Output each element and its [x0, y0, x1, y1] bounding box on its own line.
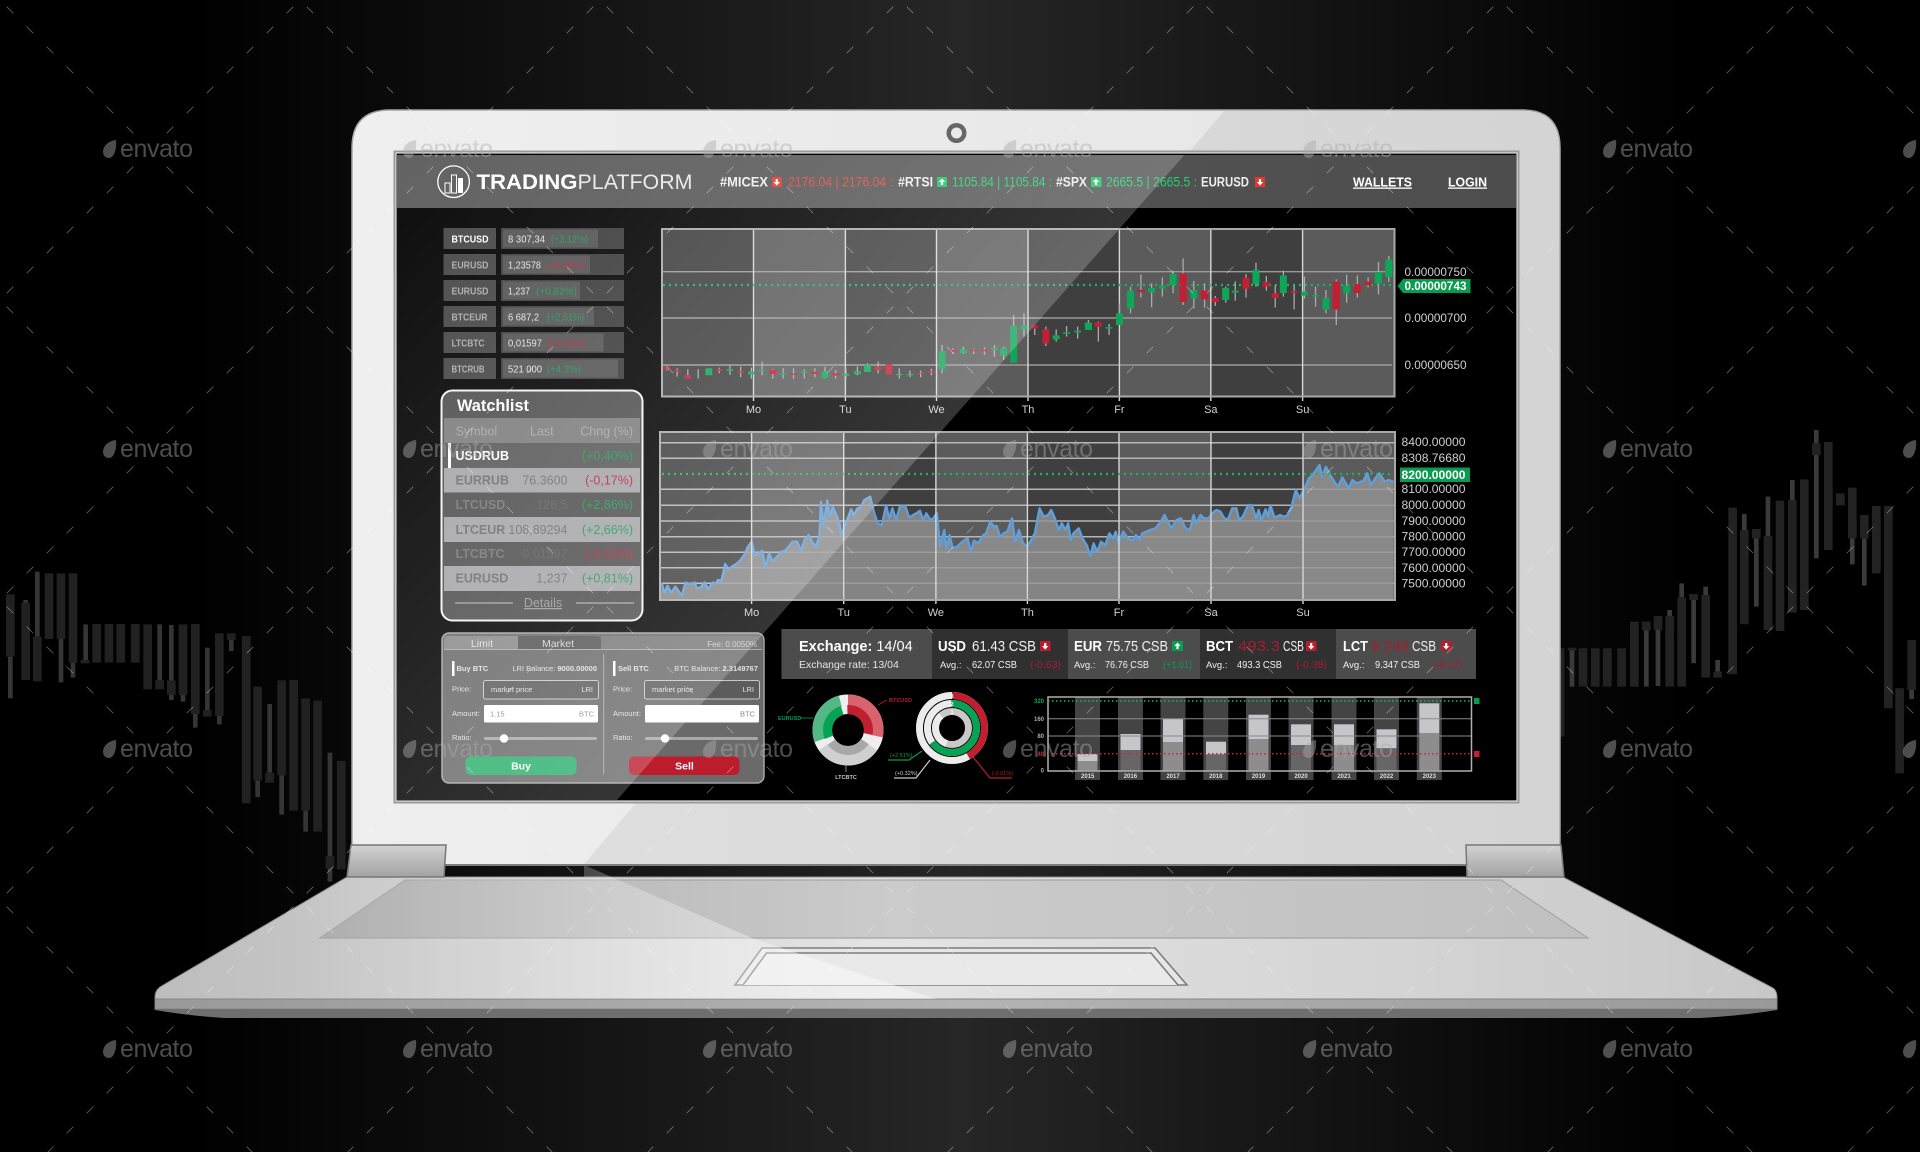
nav: wallets: WALLETS	[1353, 174, 1412, 190]
watermarks: envato	[720, 1035, 793, 1063]
ticker row: LTCBTC: LTCBTC	[452, 338, 485, 350]
candlestick chart	[662, 229, 1470, 416]
table header: Symbol	[456, 424, 497, 438]
watermarks: envato	[1620, 435, 1693, 463]
value axis: 160	[1034, 717, 1045, 723]
base front lip	[155, 999, 1777, 1009]
value axis: 80	[1037, 734, 1045, 740]
target line	[662, 473, 1394, 475]
callout: white: (+0.32%)	[895, 771, 918, 777]
exchange date	[782, 629, 932, 679]
tab: limit	[444, 636, 518, 650]
day axis: Fr	[1114, 607, 1125, 619]
row: LTCEUR: LTCEUR	[456, 523, 505, 537]
ring numbers: 1	[950, 710, 954, 716]
watermarks: envato	[1320, 735, 1393, 763]
row: LTCUSD	[444, 492, 640, 517]
day axis: Th	[1021, 607, 1034, 619]
ticker row: BTCUSD: (+3,12%)	[551, 234, 588, 246]
sell form: Price:	[613, 684, 632, 694]
details link: Details	[524, 596, 562, 610]
watermarks: envato	[1620, 1035, 1693, 1063]
rate: EUR: 76.76 CSB	[1105, 660, 1149, 671]
market ticker: #MICEX	[720, 174, 768, 190]
current price tag: 8200.00000	[1402, 470, 1466, 482]
donut chart: rings	[888, 694, 1013, 778]
ticker row: BTCRUB	[444, 358, 624, 379]
year axis: 2021	[1337, 774, 1351, 780]
watermarks: envato	[1320, 135, 1393, 163]
row: USDRUB	[444, 443, 640, 468]
rate: LCT: 9.246	[1371, 639, 1409, 655]
year axis: 2018	[1209, 774, 1223, 780]
buy form: 1.15	[490, 710, 505, 718]
rate: LCT: LCT	[1343, 639, 1368, 655]
day axis: Fr	[1114, 404, 1125, 416]
ticker row: EURUSD: 1,23578	[508, 260, 541, 272]
ring numbers: 3	[950, 694, 954, 700]
rate: BCT: (-0.38)	[1296, 660, 1327, 671]
label: EURUSD: EURUSD	[778, 716, 801, 722]
panel: order form	[442, 633, 764, 783]
ticker row: LTCBTC: 0,01597	[508, 338, 542, 350]
day axis: Tu	[837, 607, 850, 619]
sell form: Sell BTC	[618, 664, 649, 673]
price axis: 7600.00000	[1402, 563, 1466, 575]
callout: red: (-0.01%)	[992, 771, 1013, 777]
sell form: LRI	[742, 685, 754, 694]
base underside	[155, 1009, 1777, 1018]
row: USDRUB: (+0,40%)	[582, 449, 633, 463]
background candles: left	[10, 572, 341, 882]
market ticker: EURUSD	[1201, 174, 1249, 190]
legend markers	[1474, 698, 1480, 757]
watermarks: envato	[420, 735, 493, 763]
buy form: Price:	[452, 684, 471, 694]
buy form: Ratio:	[452, 733, 472, 742]
price axis: 7500.00000	[1402, 578, 1466, 590]
rate: USD: (-0.63)	[1030, 660, 1061, 671]
day axis: Mo	[746, 404, 761, 416]
sell form: market price	[652, 685, 693, 694]
price line	[663, 284, 1394, 286]
sell button	[629, 756, 740, 775]
year axis: 2019	[1252, 774, 1266, 780]
sell form: Ratio:	[613, 733, 633, 742]
keyboard area	[320, 880, 1588, 938]
row: LTCBTC: (-0,01%)	[585, 547, 633, 561]
price axis: 8000.00000	[1402, 500, 1466, 512]
buy form: Buy BTC	[456, 664, 489, 673]
laptop lid	[352, 110, 1560, 865]
rate: USD	[932, 629, 1068, 679]
watermarks: envato	[1320, 1035, 1393, 1063]
day axis: Mo	[744, 607, 759, 619]
tab: market	[518, 636, 601, 650]
price axis: 0.00000700	[1404, 313, 1466, 325]
hinge: left	[347, 845, 446, 877]
day axis: Su	[1296, 404, 1309, 416]
bars	[1078, 703, 1439, 761]
donut chart: allocation	[778, 698, 912, 781]
webcam	[946, 123, 966, 143]
target line	[1048, 700, 1471, 702]
day axis: We	[928, 404, 945, 416]
day axis: Sa	[1204, 404, 1218, 416]
rate: USD: 62.07 CSB	[972, 660, 1017, 671]
market ticker: 2665.5 | 2665.5 :	[1106, 174, 1197, 190]
row: LTCUSD: LTCUSD	[456, 498, 505, 512]
row: EURUSD: (+0,81%)	[582, 572, 633, 586]
ticker row: EURUSD 2: (+0,82%)	[536, 286, 577, 298]
ticker list	[444, 228, 624, 379]
watermarks: envato	[1020, 735, 1093, 763]
ticker row: BTCRUB: 521 000	[508, 364, 542, 376]
buy form	[452, 661, 598, 743]
buy form: market price	[491, 685, 532, 694]
watchlist title: Watchlist	[457, 397, 529, 415]
row: LTCEUR: 108,89294	[508, 523, 568, 537]
market ticker: 1105.84 | 1105.84 :	[952, 174, 1052, 190]
year axis: 2016	[1124, 774, 1138, 780]
watermarks: envato	[120, 735, 193, 763]
row: LTCUSD: 128,5	[536, 498, 568, 512]
rate: BCT: BCT	[1206, 639, 1233, 655]
day axis: Tu	[839, 404, 852, 416]
price axis: 7800.00000	[1402, 532, 1466, 544]
watermarks: envato	[1020, 435, 1093, 463]
ticker row: EURUSD: (+0,32%)	[547, 260, 584, 272]
market ticker: #SPX	[1056, 174, 1087, 190]
buy form: LRI Balance: 9000.00000	[512, 664, 597, 673]
laptop base	[155, 877, 1777, 1018]
sell button: Sell	[675, 760, 694, 772]
ticker row: EURUSD 2: EURUSD	[452, 286, 489, 298]
current price tag: 0.00000743	[1404, 281, 1466, 293]
rate: BCT: Avg.:	[1206, 660, 1227, 671]
rate: BCT: 493.3	[1238, 639, 1280, 655]
buy form: Amount:	[452, 709, 480, 718]
rate: BCT: 493.3 CSB	[1237, 660, 1282, 671]
market ticker	[720, 174, 1265, 190]
exchange date: Exchange: 14/04	[799, 639, 913, 655]
watermarks: envato	[720, 135, 793, 163]
ticker row: BTCUSD: 8 307,34	[508, 234, 545, 246]
watermarks: envato	[1320, 435, 1393, 463]
table header: Chng (%)	[580, 424, 633, 438]
price axis: 7700.00000	[1402, 547, 1466, 559]
price axis	[1404, 267, 1466, 372]
header bar	[397, 155, 1516, 208]
rate: USD: USD	[938, 639, 966, 655]
sell form: BTC Balance: 2.3149767	[674, 664, 758, 673]
candles, early week	[667, 345, 942, 379]
label: LTCBTC: LTCBTC	[835, 775, 857, 781]
rate: USD: Avg.:	[940, 660, 961, 671]
watermarks: envato	[1020, 135, 1093, 163]
label: BTCUSD: BTCUSD	[889, 698, 912, 704]
value axis: 320	[1034, 699, 1045, 705]
rate: LCT: CSB	[1412, 639, 1436, 655]
row: USDRUB: USDRUB	[456, 449, 509, 463]
ticker row: BTCEUR: 6 687,2	[508, 312, 539, 324]
ticker row: BTCUSD: BTCUSD	[452, 234, 489, 246]
row: EURUSD: 1,237	[536, 572, 568, 586]
price axis: 8100.00000	[1402, 484, 1466, 496]
background candles: right	[1560, 430, 1912, 773]
market ticker: #RTSI	[898, 174, 933, 190]
rate: LCT: (-0.17)	[1433, 660, 1462, 671]
day axis: We	[928, 607, 944, 619]
watermarks: envato	[720, 435, 793, 463]
sell form: Amount:	[613, 709, 641, 718]
ticker row: LTCBTC: (-0,01%)	[547, 338, 585, 350]
watermarks: envato	[720, 735, 793, 763]
ring numbers: 2	[950, 702, 954, 708]
table header	[444, 418, 640, 443]
price axis: 7900.00000	[1402, 516, 1466, 528]
sell form: BTC	[740, 710, 756, 718]
brand name: TRADING PLATFORM	[476, 171, 692, 194]
day axis: Th	[1022, 404, 1034, 416]
day axis	[744, 607, 1310, 619]
row: LTCBTC	[444, 542, 640, 566]
year axis: 2015	[1081, 774, 1095, 780]
ticker row: BTCRUB: BTCRUB	[452, 364, 485, 376]
rate: EUR: (+1.01)	[1163, 660, 1192, 671]
rate: EUR: Avg.:	[1074, 660, 1095, 671]
exchange rate strip	[782, 629, 1476, 679]
candles, late week	[953, 256, 1389, 363]
price axis: 8400.00000	[1402, 437, 1466, 449]
price area and line	[661, 465, 1394, 600]
year axis: 2017	[1166, 774, 1180, 780]
buy button: Buy	[511, 760, 531, 772]
hinge: right	[1466, 845, 1564, 877]
value axis: 0	[1041, 768, 1045, 774]
row: LTCEUR: (+2,66%)	[582, 523, 633, 537]
rate: LCT	[1336, 629, 1476, 679]
row: EURUSD	[444, 566, 640, 591]
day axis	[746, 404, 1309, 416]
row: LTCUSD: (+2,86%)	[582, 498, 633, 512]
watermarks: envato	[420, 435, 493, 463]
ticker row: BTCRUB: (+4,3%)	[547, 364, 581, 376]
tab: limit: Limit	[471, 638, 493, 650]
watermarks: envato	[120, 135, 193, 163]
touchpad	[735, 948, 1187, 985]
ticker row: BTCEUR: (+2,51%)	[547, 312, 584, 324]
tab: market: Market	[542, 638, 574, 650]
ticker row: BTCEUR	[444, 306, 624, 327]
row: EURRUB: 76.3600	[522, 474, 568, 488]
price axis: 0.00000650	[1404, 360, 1466, 372]
buy button	[466, 756, 576, 775]
bar chart	[1034, 697, 1480, 780]
callout: green: (+2.51%)	[890, 753, 913, 759]
rate: BCT	[1200, 629, 1336, 679]
watermarks	[120, 135, 1693, 1063]
ticker row: EURUSD 2	[444, 280, 624, 301]
row: LTCEUR	[444, 517, 640, 542]
row: EURRUB: EURRUB	[456, 474, 509, 488]
row: LTCBTC: 0,01597	[522, 547, 568, 561]
price axis	[1402, 437, 1466, 590]
fee label	[601, 636, 762, 649]
ring numbers	[950, 694, 954, 716]
rate: BCT: CSB	[1283, 639, 1304, 655]
screen	[394, 152, 1518, 802]
day axis: Su	[1296, 607, 1310, 619]
ticker row: EURUSD	[444, 254, 624, 275]
row: EURRUB: (-0,17%)	[585, 474, 633, 488]
stop line	[1048, 753, 1471, 755]
ticker row: BTCEUR: BTCEUR	[452, 312, 488, 324]
line chart	[660, 432, 1470, 619]
year axis: 2023	[1423, 774, 1437, 780]
year axis: 2020	[1294, 774, 1308, 780]
ticker row: EURUSD: EURUSD	[452, 260, 489, 272]
fee label: Fee: 0.0050%	[707, 640, 757, 649]
watermarks: envato	[120, 435, 193, 463]
buy form: LRI	[581, 685, 593, 694]
ticker row: BTCUSD	[444, 228, 624, 249]
buy form: BTC	[579, 710, 595, 718]
watermarks: envato	[420, 1035, 493, 1063]
watermarks: envato	[420, 135, 493, 163]
row: LTCBTC: LTCBTC	[456, 547, 505, 561]
watermarks: envato	[1020, 1035, 1093, 1063]
ticker row: EURUSD 2: 1,237	[508, 286, 530, 298]
day axis: Sa	[1204, 607, 1219, 619]
watermarks: envato	[1620, 735, 1693, 763]
rate: EUR	[1068, 629, 1200, 679]
value axis: 40	[1037, 752, 1045, 758]
rate: USD: 61.43 CSB	[972, 639, 1036, 655]
market ticker: 2176.04 | 2176.04 :	[788, 174, 893, 190]
ticker row: LTCBTC	[444, 332, 624, 353]
logo	[438, 166, 469, 198]
watermarks: envato	[1620, 135, 1693, 163]
year axis	[1081, 774, 1437, 780]
rate: EUR: 75.75 CSB	[1106, 639, 1168, 655]
exchange date: Exchange rate: 13/04	[799, 659, 899, 671]
price axis: 0.00000750	[1404, 267, 1466, 279]
panel: watchlist	[442, 390, 642, 620]
value axis	[1034, 699, 1045, 774]
sell form	[613, 661, 760, 743]
watermarks: envato	[120, 1035, 193, 1063]
row: EURUSD: EURUSD	[456, 572, 508, 586]
rate: LCT: 9.347 CSB	[1375, 660, 1420, 671]
rate: EUR: EUR	[1074, 639, 1102, 655]
price axis: 8308.76680	[1402, 453, 1466, 465]
nav: login: LOGIN	[1448, 174, 1487, 190]
table header: Last	[530, 424, 554, 438]
year axis: 2022	[1380, 774, 1394, 780]
row: EURRUB	[444, 468, 640, 492]
rate: LCT: Avg.:	[1343, 660, 1364, 671]
